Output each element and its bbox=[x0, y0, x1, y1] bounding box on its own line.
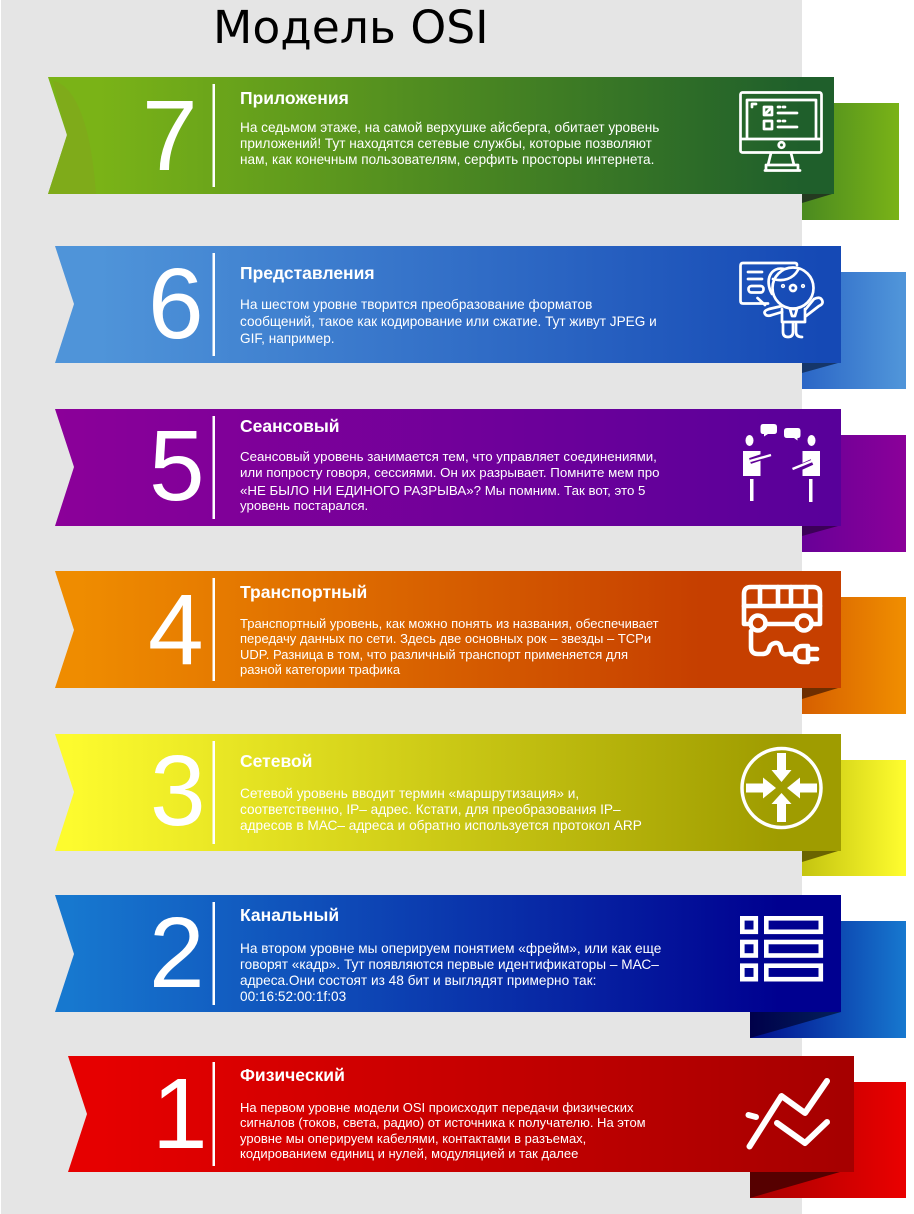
description: сообщений, такое как кодирование или сжатие. Тут живут JPEG и bbox=[240, 314, 657, 329]
ribbon back bbox=[802, 103, 899, 220]
description: передачу данных по сети. Здесь две основных рок – звезды – TCPи bbox=[240, 631, 651, 646]
icon: router bbox=[742, 748, 821, 828]
icon: teacher at board bbox=[740, 263, 823, 337]
ribbon fold bbox=[750, 1012, 841, 1038]
ribbon back bbox=[802, 597, 906, 714]
heading: Сеансовый bbox=[240, 416, 340, 436]
description: уровень постарался. bbox=[240, 498, 368, 513]
ribbon back bbox=[750, 1082, 906, 1198]
divider bbox=[212, 578, 215, 681]
heading: Транспортный bbox=[240, 582, 367, 602]
ribbon front bbox=[55, 895, 841, 1012]
icon: signal lines bbox=[748, 1081, 827, 1146]
panel: level 2 data link bbox=[55, 895, 906, 1038]
ribbon fold bbox=[750, 1172, 840, 1198]
number 3: 3 bbox=[150, 735, 206, 847]
description: На втором уровне мы оперируем понятием «фрейм», или как еще bbox=[240, 941, 661, 956]
number 5: 5 bbox=[149, 410, 205, 522]
description: адреса.Они состоят из 48 бит и выглядят примерно так: bbox=[240, 973, 596, 988]
divider bbox=[212, 902, 215, 1005]
divider bbox=[212, 1062, 215, 1166]
description: приложений! Тут находятся сетевые службы, которые позволяют bbox=[240, 136, 652, 151]
heading: Приложения bbox=[240, 88, 349, 108]
description: Транспортный уровень, как можно понять из названия, обеспечивает bbox=[240, 616, 659, 631]
ribbon tail shading bbox=[48, 81, 96, 194]
ribbon fold bbox=[802, 526, 838, 536]
description: На первом уровне модели OSI происходит передачи физических bbox=[240, 1100, 634, 1115]
panel: level 4 transport bbox=[55, 571, 906, 714]
number 2: 2 bbox=[149, 897, 205, 1009]
ribbon front bbox=[68, 1056, 854, 1172]
divider bbox=[212, 84, 215, 187]
description: «НЕ БЫЛО НИ ЕДИНОГО РАЗРЫВА»? Мы помним. Так вот, это 5 bbox=[240, 483, 645, 498]
heading: Представления bbox=[240, 263, 375, 283]
ribbon front bbox=[48, 77, 834, 194]
description: GIF, например. bbox=[240, 331, 335, 346]
ribbon fold bbox=[802, 851, 838, 862]
description: соответственно, IP– адрес. Кстати, для преобразования IP– bbox=[240, 802, 621, 817]
description: 00:16:52:00:1f:03 bbox=[240, 989, 346, 1004]
description: Сеансовый уровень занимается тем, что управляет соединениями, bbox=[240, 449, 657, 464]
panel: level 7 application bbox=[48, 77, 899, 220]
description: уровне мы оперируем кабелями, контактами в разъемах, bbox=[240, 1131, 586, 1146]
ribbon fold bbox=[802, 688, 838, 699]
description: Сетевой уровень вводит термин «маршрутизация» и, bbox=[240, 786, 579, 801]
ribbon front bbox=[55, 409, 841, 526]
divider bbox=[212, 416, 215, 519]
description: адресов в МАС– адреса и обратно используется протокол ARP bbox=[240, 818, 642, 833]
number 1: 1 bbox=[152, 1058, 208, 1170]
ribbon back bbox=[802, 272, 906, 389]
icon: electric bus bbox=[744, 587, 820, 662]
number 7: 7 bbox=[142, 80, 198, 192]
heading: Сетевой bbox=[240, 751, 312, 771]
description: UDP. Разница в том, что различный транспорт применяется для bbox=[240, 647, 628, 662]
panel: level 5 session bbox=[55, 409, 906, 552]
panel: level 1 physical bbox=[68, 1056, 906, 1198]
number 4: 4 bbox=[148, 574, 204, 686]
heading: Канальный bbox=[240, 905, 339, 925]
ribbon front bbox=[55, 571, 841, 688]
ribbon front bbox=[55, 246, 841, 363]
icon: list bbox=[742, 918, 821, 979]
description: говорят «кадр». Тут появляются первые идентификаторы – МАС– bbox=[240, 957, 659, 972]
icon: two people talking bbox=[743, 424, 820, 502]
ribbon fold bbox=[802, 363, 838, 373]
number 6: 6 bbox=[148, 248, 204, 360]
panel: level 6 presentation bbox=[55, 246, 906, 389]
description: На седьмом этаже, на самой верхушке айсберга, обитает уровень bbox=[240, 120, 659, 135]
icon: monitor bbox=[740, 92, 822, 170]
ribbon back bbox=[802, 760, 906, 876]
ribbon back bbox=[750, 921, 906, 1038]
ribbon back bbox=[802, 435, 906, 552]
description: нам, как конечным пользователям, серфить просторы интернета. bbox=[240, 152, 654, 167]
ribbon fold bbox=[802, 194, 832, 203]
description: На шестом уровне творится преобразование форматов bbox=[240, 297, 592, 312]
title: Модель OSI bbox=[213, 1, 489, 54]
panel: level 3 network bbox=[55, 734, 906, 876]
divider bbox=[212, 741, 215, 844]
description: сигналов (токов, света, радио) от источника к получателю. На этом bbox=[240, 1115, 646, 1130]
description: разной категории трафика bbox=[240, 662, 401, 677]
description: или попросту говоря, сессиями. Он их разрывает. Помните мем про bbox=[240, 465, 660, 480]
divider bbox=[212, 253, 215, 356]
description: кодированием единиц и нулей, модуляцией и так далее bbox=[240, 1146, 578, 1161]
ribbon front bbox=[55, 734, 841, 851]
heading: Физический bbox=[240, 1065, 345, 1085]
